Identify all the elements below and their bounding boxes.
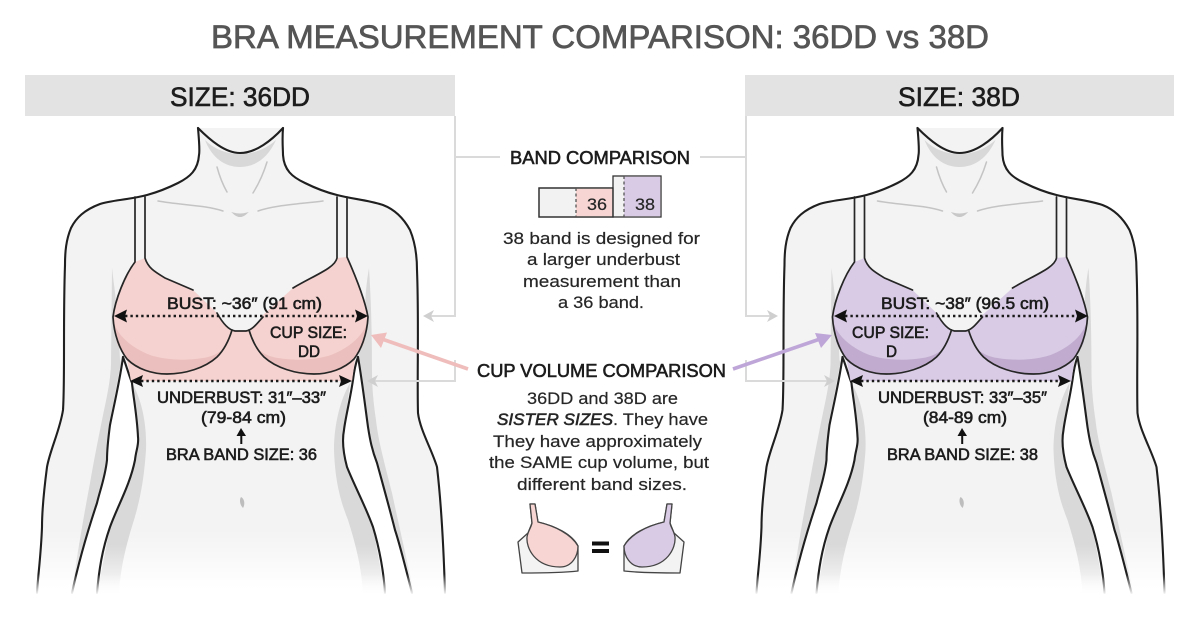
text: sister sizes explanation: different band sizes. xyxy=(517,475,687,494)
text: sister sizes explanation: They have approximately xyxy=(493,432,703,451)
underbust measurement: 38: (84-89 cm) xyxy=(923,409,1007,427)
arrow: underbust to band size 38 xyxy=(958,428,967,444)
band comparison diagram: 38 xyxy=(635,195,655,214)
panel: size 36DD xyxy=(25,75,455,598)
icon: equals sign xyxy=(592,542,609,553)
connector: left underbust xyxy=(367,360,455,387)
body figure: 36DD xyxy=(30,128,455,598)
arrow: cup comparison to 38D xyxy=(733,333,832,369)
header: size 38D: SIZE: 38D xyxy=(898,82,1020,112)
underbust measurement: 36: (79-84 cm) xyxy=(201,409,286,427)
panel: size 38D xyxy=(745,75,1174,598)
bust measurement: 38: BUST: ~38″ (96.5 cm) xyxy=(881,295,1049,313)
heading: band comparison: BAND COMPARISON xyxy=(510,147,690,168)
cup size label: D: CUP SIZE: xyxy=(852,324,929,342)
text: band explanation: a 36 band. xyxy=(558,293,644,312)
cup size label: D: D xyxy=(886,343,897,361)
heading: cup volume comparison: CUP VOLUME COMPARISON xyxy=(477,360,726,381)
connector: right underbust xyxy=(746,360,835,387)
title: BRA MEASUREMENT COMPARISON: 36DD vs 38D xyxy=(211,19,989,55)
bust measurement: 36: BUST: ~36″ (91 cm) xyxy=(167,295,322,313)
cup size label: DD xyxy=(270,324,347,361)
text: sister sizes explanation xyxy=(489,389,709,494)
text: sister sizes explanation: 36DD and 38D are xyxy=(527,389,678,408)
text: band explanation: 38 band is designed for xyxy=(503,229,700,248)
band size label: 38: BRA BAND SIZE: 38 xyxy=(887,446,1038,464)
underbust measurement: 36 xyxy=(130,375,352,427)
bra: 38D purple xyxy=(832,197,1088,381)
text: sister sizes explanation: . They have xyxy=(613,410,708,429)
underbust measurement: 36: UNDERBUST: 31″–33″ xyxy=(157,389,326,407)
arrow: cup comparison to 36DD xyxy=(371,332,468,369)
icon: pink bra cup xyxy=(518,504,578,573)
body figure: 38D xyxy=(750,128,1174,598)
text: band explanation xyxy=(503,229,700,312)
bra: 36DD pink xyxy=(113,197,368,381)
cup size label: DD: DD xyxy=(298,343,320,361)
cup size label: D xyxy=(852,324,929,361)
header: size 36DD: SIZE: 36DD xyxy=(170,82,310,112)
band comparison diagram: 36 xyxy=(587,195,607,214)
band comparison diagram xyxy=(539,176,661,217)
underbust measurement: 38: UNDERBUST: 33″–35″ xyxy=(878,389,1047,407)
band size label: 36: BRA BAND SIZE: 36 xyxy=(166,446,317,464)
text: band explanation: a larger underbust xyxy=(527,250,680,269)
connector: band comparison to right bust xyxy=(700,116,778,322)
text: band explanation: measurement than xyxy=(523,272,681,291)
underbust measurement: 38 xyxy=(850,375,1071,427)
arrow: underbust to band size 36 xyxy=(236,428,246,444)
bust measurement: 36 xyxy=(114,295,368,322)
header: size 38D xyxy=(745,75,1174,116)
icon: purple bra cup xyxy=(624,504,684,573)
connector: band comparison to left bust xyxy=(423,116,500,322)
text: sister sizes explanation: the SAME cup volume, but xyxy=(489,453,709,472)
cup size label: DD: CUP SIZE: xyxy=(270,324,347,342)
header: size 36DD xyxy=(25,75,455,116)
text: sister sizes explanation: SISTER SIZES xyxy=(497,410,614,429)
bust measurement: 38 xyxy=(834,295,1088,322)
